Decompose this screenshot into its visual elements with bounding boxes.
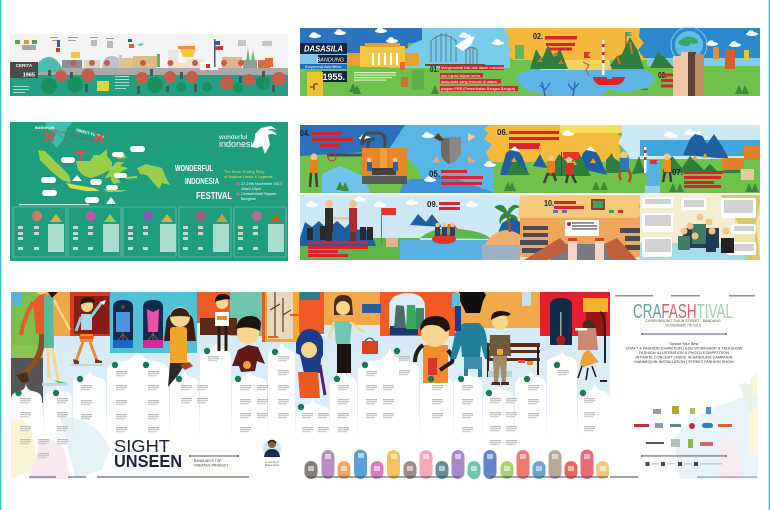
watercolor splash right: [674, 372, 758, 479]
event details: 10am-10pm: [241, 187, 261, 191]
point 03: 03.: [658, 71, 667, 80]
water plants: [540, 82, 579, 96]
pipe: [327, 133, 385, 157]
wonderful indonesia logo: indonesia: [219, 139, 258, 149]
list text blocks: [20, 356, 595, 458]
numbered dots: [15, 348, 586, 410]
point 06: [497, 127, 559, 149]
building: [347, 43, 419, 67]
title: Sight Unseen: SIGHT: [114, 436, 170, 456]
lake: [516, 70, 656, 96]
point 07: 07.: [672, 167, 683, 177]
wonderful indonesia logo: [218, 126, 277, 154]
clouds: [306, 196, 478, 207]
handshake: [325, 200, 396, 244]
dove sign: [741, 169, 754, 180]
divider line upper: [641, 333, 727, 335]
lighthouse and flags: [583, 32, 632, 76]
panel: points 04 to 07 strip: [300, 125, 760, 193]
portrait: In memory of: [265, 461, 279, 464]
shop windows upper: [452, 292, 531, 331]
mountains: [530, 37, 644, 69]
clouds: [359, 129, 696, 182]
point 07: [672, 167, 723, 188]
lighthouse: [644, 147, 658, 173]
panel: Wonderful Indonesia Festival: [10, 122, 288, 261]
walking person one: [16, 292, 46, 383]
title: Sight Unseen: [114, 436, 182, 471]
signatories section: [640, 195, 760, 260]
point 04: [300, 129, 353, 147]
location and date: NOVEMBER 7th 2015: [665, 324, 701, 328]
point 01: 01.: [430, 65, 439, 74]
point 05: 05.: [429, 169, 440, 179]
meeting room: [362, 148, 407, 184]
title: Dasasila: [300, 43, 347, 82]
event list: INTIMATE CONCERT | MADE IN BANDUNG CAMPAIGN: [635, 356, 733, 360]
mountains: [500, 130, 760, 176]
teal panel text: [13, 76, 129, 93]
watercolor splash left: [11, 415, 110, 479]
man with telescope: [310, 153, 336, 187]
panel: Dasasila Bandung 1955: [300, 27, 760, 96]
finger tab icons: [308, 453, 606, 471]
dove: [455, 36, 475, 51]
arched window with tree: [262, 292, 300, 342]
festival title: WONDERFUL: [175, 163, 213, 173]
card text: [48, 224, 284, 252]
shop window: [389, 293, 425, 335]
skyline buildings: [62, 39, 273, 70]
back view man: [450, 292, 491, 377]
flight labels and planes: DIRECT FLIGHT: [76, 128, 105, 140]
bird cage: [431, 33, 477, 66]
body text: [354, 72, 396, 81]
green event circles: [41, 76, 270, 94]
festival title: FESTIVAL: [196, 190, 232, 202]
destination labels: [41, 146, 145, 204]
social icons: [646, 462, 722, 466]
event details: 17-19th November 2017,: [241, 182, 283, 186]
hijab girl: [296, 329, 325, 398]
ground shapes: [300, 160, 660, 193]
location and date: CIHAPUNDUNG TIMUR STREET - BANDUNG: [645, 319, 721, 323]
red event pins: [55, 68, 286, 90]
point 09: 09.: [427, 199, 438, 209]
point 03: [658, 71, 700, 88]
point 10: 10.: [544, 198, 554, 208]
location and date: [645, 319, 721, 328]
panel: Sight Unseen: [11, 292, 757, 480]
palm island: [482, 205, 528, 260]
seated woman and chair: [575, 320, 607, 382]
people with flag: [544, 152, 579, 183]
flight path: [54, 130, 98, 152]
divider line lower: [641, 455, 727, 457]
sign: [386, 238, 398, 247]
event details: [224, 170, 283, 201]
event details: Bangkok: [241, 197, 256, 201]
coloured finger tabs: [304, 450, 609, 479]
title block: CERITA: [16, 63, 33, 68]
event list: CRAFT & FASHION EXHIBITION | EDU WORKSHOP & TALKSHOW: [626, 346, 743, 350]
card icons: [32, 211, 282, 222]
raft: [432, 223, 456, 244]
portrait: Ridwan Kamil: [265, 465, 280, 467]
yellow shirt: [97, 81, 109, 91]
clouds: [309, 27, 758, 50]
event details: CentralWorld Square,: [241, 192, 277, 196]
title: Dasasila: 1955.: [322, 72, 345, 82]
festival title: INDONESIA: [185, 176, 219, 186]
walking person two: [42, 292, 70, 386]
doorway and boy: [71, 296, 109, 366]
point 02: [533, 32, 577, 50]
point 05: [429, 169, 483, 185]
event details: The Never Ending Story: [224, 170, 265, 174]
road markers: [70, 60, 244, 66]
region cards: [13, 207, 286, 257]
point 01: Menghormati hak-hak dasar manusia: [441, 66, 505, 70]
top mini labels: [15, 37, 272, 52]
woman with red bag: [329, 295, 381, 373]
festival title: [175, 163, 232, 202]
point 04: 04.: [300, 129, 310, 138]
bottom rules: [29, 476, 757, 478]
logo text: CRAFASHTIVAL: [633, 301, 733, 323]
title: Dasasila: Konperensi Asia Afrika: [305, 65, 341, 69]
point 09: [427, 199, 460, 210]
legend strip: [19, 204, 89, 205]
title: Dasasila: BANDUNG: [316, 58, 345, 64]
title block: 1965: [23, 72, 35, 78]
title block: [10, 62, 38, 78]
mountains: [300, 214, 524, 246]
hands holding globe: [671, 27, 707, 96]
event list: MANNEQUIN INSTALLATION | STREET FASHION SHOW: [634, 360, 734, 364]
event list: [626, 342, 743, 364]
point 01: [430, 65, 518, 91]
subtitle with arrow line: [189, 455, 239, 468]
display cabinets: [110, 300, 197, 353]
boat: [593, 66, 625, 85]
point 08: [308, 241, 368, 257]
point 01: asas-asas yang termuat di dalam: [441, 80, 497, 84]
subtitle with arrow line: BANDUNG'S TOP: [194, 459, 222, 463]
hill and trees right: [515, 45, 749, 69]
event list: " Splash Your Best ": [667, 342, 702, 346]
panel: points 08 to 10 strip: [300, 195, 760, 260]
trees: [307, 62, 749, 96]
subtitle with arrow line: CREATIVE PRODUCT: [194, 464, 228, 468]
white scalloped arches: [11, 342, 610, 480]
event details: of Mystical Lands & Legends: [224, 175, 273, 179]
skies: [300, 125, 760, 193]
point 10 scene: [518, 195, 650, 260]
ground and river: [300, 228, 515, 260]
crowd: [307, 226, 373, 240]
panel: Cerita 1965 timeline: [10, 34, 288, 96]
card thumbnails: [18, 226, 258, 250]
point 01: piagam PBB (Perserikatan Bangsa-Bangsa): [441, 87, 516, 91]
point 10: [544, 198, 584, 209]
seated man on bench: [487, 311, 540, 385]
portrait: [263, 440, 281, 467]
man by bench: [200, 294, 237, 351]
point 01: dan tujuan-tujuan serta: [441, 74, 481, 78]
wonderful indonesia logo: wonderful: [218, 134, 248, 141]
street backdrop colors: [11, 292, 610, 440]
big head boy: [415, 316, 452, 383]
map of Indonesia: [38, 122, 170, 192]
top rules: [615, 295, 755, 296]
people: [48, 69, 275, 94]
sponsor logos: [634, 406, 732, 448]
trees: [336, 181, 759, 192]
runner: [606, 152, 645, 182]
point 06: 06.: [497, 127, 508, 137]
event list: FASHION ILLUSTRATION & PHOTO COMPETITION: [639, 351, 729, 355]
flight labels and planes: [35, 126, 105, 161]
girl with bag: [164, 307, 196, 387]
panel: Crafashtival: [615, 295, 758, 479]
red boutique: [543, 292, 610, 363]
point 02: 02.: [533, 32, 543, 41]
boy in dark jacket: [232, 316, 265, 372]
title: Dasasila: DASASILA: [304, 44, 343, 54]
skies: [300, 28, 760, 70]
title: Sight Unseen: UNSEEN: [114, 451, 182, 471]
flight labels and planes: BANGKOK: [35, 126, 55, 130]
shield and hands: [432, 133, 476, 164]
woman at right: [663, 154, 671, 182]
